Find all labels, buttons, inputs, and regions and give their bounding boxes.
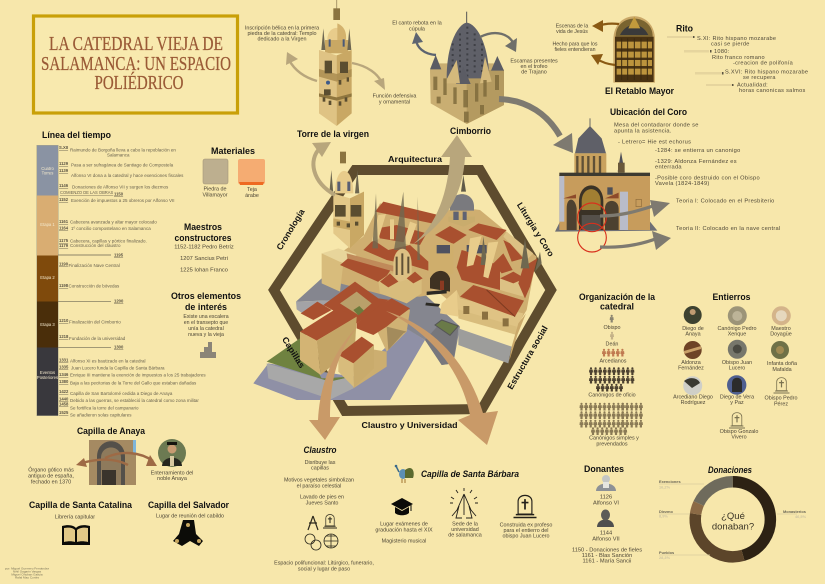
heading: materiales: Materiales: [211, 146, 255, 156]
timeline events: 1164: [59, 226, 69, 230]
text: escamas: Escamas presentes: [510, 58, 558, 64]
burial labels: Obispo Juan: [722, 360, 752, 366]
heading: torre: Torre de la virgen: [297, 129, 369, 139]
text: escalera: unía la catedral: [188, 326, 224, 332]
panel: torre de la virgen: [245, 0, 416, 139]
burial labels: Anaya: [685, 332, 701, 338]
panel: retablo mayor: [552, 16, 674, 96]
text: órgano: antiguo de españa,: [28, 474, 74, 480]
label: teja árabe: árabe: [245, 193, 259, 199]
timeline events: Alfonso XI es bautizado en la catedral: [70, 358, 146, 364]
list of masters: 1207 Sancius Petri: [180, 256, 228, 262]
label: estructura social: Estructura social: [505, 324, 550, 391]
text: canto: El canto rebota en la: [392, 20, 442, 26]
text: coro notes: -Posible coro destruido con el Obispo: [655, 176, 760, 182]
timeline events: 1175: [59, 238, 69, 243]
illustration: coro: [555, 118, 657, 252]
bust: Alfonso VI: [596, 475, 616, 491]
panel: organización de la catedral: [579, 292, 656, 447]
text: Alfonso VII: Alfonso VII: [592, 536, 620, 542]
panel: materiales: [202, 146, 265, 199]
text: donaciones list: 1150 - Donaciones de fieles: [572, 548, 642, 554]
timeline events: 1º concilio compostelano en Salamanca: [71, 226, 151, 231]
donut labels: Pueblos: [659, 550, 674, 555]
text: magisterio: Magisterio musical: [382, 538, 426, 544]
timeline events: 1210: [59, 318, 69, 323]
timeline events: Se fortifica la torre del campanario: [70, 406, 139, 410]
arrow: to inscripción: [286, 52, 317, 81]
burial labels: Lucero: [729, 366, 745, 372]
hexagon frame: [274, 170, 551, 411]
heading: rito: Rito: [676, 24, 693, 34]
illustration: retablo: [613, 16, 655, 83]
burial portraits: [683, 306, 791, 428]
panel: cimborrio: [392, 12, 558, 136]
hexagon labels: [274, 154, 556, 430]
text: rito list: se recupera: [743, 75, 776, 81]
timeline events: Se añadieron solas capitulares: [70, 412, 132, 418]
heading: línea del tiempo: Línea del tiempo: [42, 130, 111, 140]
arrows: [76, 453, 157, 467]
text: enterramiento: Enterramiento del: [151, 470, 193, 476]
illustration: catedral: [253, 152, 542, 400]
text: coro notes: enterrada: [655, 164, 682, 170]
text: construida: Construida ex profeso: [500, 522, 552, 528]
donut labels: 28,3%: [659, 555, 671, 560]
arrow: catedral to Santa Bárbara: [386, 311, 498, 445]
icon: peacock: [395, 465, 414, 483]
pictogram: deán: [610, 332, 614, 340]
panel: línea del tiempo: [36, 130, 206, 418]
arrow: to hecho: [591, 54, 615, 65]
panel: entierros: [673, 292, 797, 441]
timeline events: 1458: [59, 402, 69, 406]
timeline column: Eventos: [40, 370, 55, 375]
timeline events: COMIENZO DE LAS OBRAS: [60, 190, 113, 195]
heading: capilla de Anaya: Capilla de Anaya: [77, 426, 146, 436]
burial labels: [673, 326, 797, 441]
label: claustro y universidad: Claustro y Universidad: [362, 420, 458, 430]
timeline events: 1198: [59, 283, 69, 288]
icon: praying hands: [450, 488, 478, 518]
burial labels: Vivero: [731, 435, 747, 441]
text: escamas: en el trofeo: [521, 64, 547, 70]
timeline events: 1179: [59, 243, 69, 248]
panel: donaciones: [659, 465, 807, 560]
donut chart: [695, 482, 770, 557]
donut center text: ¿Qué: [721, 511, 745, 522]
label: canónigos simples: Canónigos simples y: [589, 436, 639, 442]
burial labels: y Paz: [730, 400, 744, 406]
timeline events: 1152: [59, 197, 69, 202]
panel: donantes: [572, 464, 642, 565]
text: lugar exámenes: graduación hasta el XIX: [375, 527, 433, 533]
text: Alfonso VI: Alfonso VI: [593, 500, 619, 506]
timeline events: Capilla de San Bartolomé cedida a Diego de Anaya: [70, 391, 173, 396]
text: Alfonso VII: 1144: [600, 530, 612, 536]
text: inscripción: Inscripción bélica en la primera: [245, 26, 319, 32]
arrow: catedral to torre: [312, 142, 335, 195]
timeline events: 1380: [59, 379, 69, 384]
burial labels: Doyagüe: [770, 332, 792, 338]
timeline events: 1190: [59, 262, 69, 266]
illustration: tower: [319, 0, 352, 126]
timeline events: 1422: [59, 389, 69, 394]
burial labels: Mafalda: [772, 367, 792, 373]
text: inscripción: dedicado a la Virgen: [257, 37, 307, 43]
timeline events: Construcción del claustro: [70, 243, 121, 248]
timeline events: Pasa a ser sufragánea de Santiago de Compostela: [71, 162, 174, 168]
text: rito list: -creacion de polifonía: [733, 60, 794, 66]
text: hecho: fieles entendieran: [555, 47, 596, 53]
timeline events: Debido a las guerras, se estableció la catedral como zona militar: [70, 398, 199, 403]
icons: claustro: [305, 515, 338, 550]
burial labels: Obispo Pedro: [765, 396, 797, 402]
text: Alfonso VI: 1126: [600, 494, 612, 500]
timeline events: Finalización Nave Central: [68, 263, 120, 268]
heading: organización: Organización de la: [579, 292, 656, 302]
timeline events: Cabecera, capillas y pórtico finalizado.: [70, 238, 147, 244]
timeline events: S.XII: [59, 145, 68, 150]
timeline events: Juan Lucero funda la Capilla de Santa Bárbara: [71, 366, 165, 370]
text: escamas: de Trajano: [521, 70, 547, 76]
panel: capilla del Salvador: [148, 500, 229, 546]
timeline events: 1161: [59, 219, 69, 224]
label: capillas: Capillas: [280, 335, 307, 370]
burial labels: Arcediano Diego: [673, 394, 713, 400]
label: piedra de Villamayor: Villamayor: [202, 192, 228, 198]
arrow: teoría I: [600, 200, 670, 217]
text: coro notes: Vavela (1824-1849): [655, 181, 710, 187]
burial labels: Aldonza: [681, 360, 701, 366]
label: canónigos simples: prevendados: [596, 441, 628, 447]
label: obispo: Obispo: [603, 325, 621, 331]
credits: Miguel Oñoban Galicia: [11, 572, 43, 576]
text: rito list: S.XI: Rito hispano mozarabe: [697, 36, 776, 42]
bust: Alfonso VII: [597, 510, 614, 527]
burial labels: Diego de Vera: [720, 394, 754, 400]
text: sede: universidad: [451, 527, 479, 533]
panel: otros elementos de interés: de interés: [185, 302, 227, 312]
donut labels: Exenciones: [659, 479, 681, 484]
text: coro notes: [614, 122, 781, 232]
timeline events: Fundación de la universidad: [69, 336, 126, 341]
burial labels: Canónigo Pedro: [718, 326, 756, 332]
list of masters: 1152-1182 Pedro Betríz: [174, 244, 234, 250]
timeline column: Etapa 2: [40, 275, 55, 280]
swatch: teja árabe: [238, 159, 265, 185]
text: rito list: 1080:: [714, 49, 730, 55]
heading: claustro: Claustro: [304, 445, 337, 455]
timeline events: Alfonso VI dona a la catedral y hace exenciones fiscales: [71, 173, 184, 178]
burial labels: Diego de: [682, 326, 704, 332]
icon: book: [62, 525, 90, 545]
text: coro notes: - Letrero= Hie est echorus: [618, 140, 691, 146]
donut labels: Diezmo: [659, 509, 673, 514]
arrow: to escenas: [592, 20, 619, 32]
timeline events: Exención de impuestos a 25 obreros por Alfonso VII: [71, 198, 175, 203]
panel: rito: [667, 24, 808, 94]
ground and walls: [253, 278, 512, 400]
text: espacio polifuncional: Espacio polifuncional: Litúrgico, funerario,: [274, 560, 374, 566]
heading: donaciones: Donaciones: [708, 465, 752, 475]
donut labels: 46,5%: [795, 514, 807, 519]
title: POLIÉDRICO: [94, 71, 184, 94]
text: claustro: Disribuye las: [305, 460, 335, 466]
text: enterramiento: noble Anaya: [157, 476, 187, 482]
icon: stairs: [200, 342, 216, 358]
text: donaciones list: 1161 - Blas Sanción: [582, 553, 632, 559]
text: claustro: capillas: [311, 466, 329, 472]
text: inscripción: piedra de la catedral: Templo: [247, 31, 317, 37]
donut labels: [659, 479, 807, 560]
icon: grave: [514, 495, 536, 518]
text: coro notes: -1329: Aldonza Fernández es: [655, 159, 737, 165]
panel: maestros constructores: constructores: [174, 233, 232, 243]
timeline column: Etapa 1: [40, 222, 55, 227]
pictogram: obispo: [610, 315, 614, 322]
title: LA CATEDRAL VIEJA DE: [49, 33, 223, 55]
label: piedra de Villamayor: Piedra de: [203, 186, 227, 192]
title: SALAMANCA: UN ESPACIO: [41, 53, 231, 75]
heading: entierros: Entierros: [712, 292, 750, 302]
text: Lugar de reunión del cabildo: [156, 514, 224, 520]
text: rito list: [697, 36, 808, 94]
timeline events: Finalización del Cimborrio: [69, 320, 121, 324]
label: liturgia y coro: Liturgia y Coro: [515, 200, 556, 258]
bullet lines: [667, 36, 732, 86]
panel: ubicación del coro: [555, 107, 781, 252]
label: cronología: Cronología: [274, 207, 307, 252]
timeline events: Cabecera avanzada y altar mayor colocado: [70, 220, 157, 224]
text: construida: obispo Juan Lucero: [502, 534, 550, 540]
arrow: teoría II: [600, 231, 671, 250]
arrow: to escamas: [480, 33, 517, 52]
heading: santa bárbara: Capilla de Santa Bárbara: [421, 469, 519, 479]
text: coro notes: apunta la asistencia.: [614, 128, 672, 134]
panel: maestros constructores: [174, 222, 234, 274]
text: canto: cúpula: [409, 26, 425, 32]
timeline events: 1146: [59, 183, 69, 188]
panel: claustro: [274, 445, 374, 572]
heading: otros elementos: Otros elementos: [171, 291, 241, 301]
panel: claustro: el paraíso celestial: [297, 483, 341, 489]
text: órgano: fechado en 1370: [31, 480, 71, 486]
timeline events: Construcción de bóvedas: [68, 284, 120, 288]
timeline events: 1139: [59, 168, 69, 173]
text: espacio polifuncional: social y lugar de paso: [298, 566, 350, 572]
timeline column: Torres: [42, 170, 53, 176]
timeline events: 1335: [59, 364, 69, 370]
text: órgano: Órgano gótico más: [28, 468, 74, 474]
text: Librería capitular: [55, 514, 95, 520]
tower: [329, 152, 364, 248]
bullet dots: [693, 36, 734, 86]
credits: Rafal Mao Cortés: [15, 576, 39, 580]
timeline events: 1440: [59, 396, 69, 402]
text: rito list: Rito franco romano: [712, 55, 765, 61]
label: teja árabe: Teja: [247, 187, 257, 193]
right block: [425, 285, 526, 361]
text: escenas: Escenas de la: [556, 24, 588, 30]
icon: graduation cap: [391, 498, 413, 515]
icon: figures: [173, 520, 203, 546]
timeline events: 1200: [114, 298, 124, 304]
credits: Nihil Gagarin Vargas: [13, 570, 42, 574]
text: función: y ornamental: [379, 99, 410, 105]
pictogram: canónigos simples: [580, 403, 643, 435]
timeline events: 1525: [59, 410, 69, 415]
text: escenas: vida de Jesús: [556, 29, 588, 35]
label: arquitectura: Arquitectura: [388, 154, 442, 164]
timeline events: 1129: [59, 161, 69, 166]
text: escalera: nueva y la vieja: [188, 332, 224, 338]
text: hecho: Hecho para que los: [552, 42, 598, 48]
burial labels: Pérez: [774, 401, 788, 407]
swatch: piedra de Villamayor: [203, 159, 228, 184]
timeline events: 1150: [114, 192, 124, 196]
pictogram: canónigos de oficio: [589, 367, 634, 392]
timeline column: Cuatro: [41, 166, 54, 171]
heading: ubicación: Ubicación del Coro: [610, 107, 687, 117]
label: deán: Deán: [606, 342, 618, 348]
heading: Capilla del Salvador: [148, 500, 229, 510]
burial labels: Fernández: [678, 366, 704, 372]
text: sede: Sede de la: [452, 522, 478, 528]
arrow: catedral to claustro: [309, 327, 357, 440]
burial labels: Infanta doña: [767, 361, 797, 367]
text: sede: de salamanca: [448, 533, 482, 539]
timeline events: Enrique III mantiene la exención de impuestos a los 25 trabajadores: [70, 372, 206, 378]
panel: capilla de Anaya: [28, 426, 193, 486]
arrow: catedral to cimborrio: [412, 135, 472, 245]
timeline events: 1346: [59, 372, 69, 377]
credits: por: Miguel Guerrero Fernández: [5, 566, 49, 570]
burial labels: Maestro: [771, 326, 791, 332]
arrow: cimborrio to coro: [499, 99, 573, 153]
label: arcedianos: Arcedianos: [600, 358, 627, 364]
text: construida: para el entierro del: [504, 528, 548, 534]
burial labels: Rodríguez: [681, 400, 706, 406]
text: función: Función defensiva: [373, 94, 416, 100]
timeline events: 1218: [59, 334, 69, 339]
text: lugar exámenes: Lugar exámenes de: [380, 522, 428, 528]
timeline events: 1331: [59, 358, 69, 362]
arrow: to canto: [412, 32, 436, 55]
text: coro notes: Teoria II: Colocado en la nave central: [676, 226, 781, 232]
pictogram: arcedianos: [602, 349, 624, 356]
text: rito list: horas canonicas salmos: [739, 88, 806, 94]
text: coro notes: Teoria I: Colocado en el Presbiterio: [676, 198, 775, 204]
donut center text: donaban?: [712, 522, 754, 532]
donut labels: 16,2%: [659, 484, 671, 490]
chapel apse: [378, 249, 423, 303]
text: coro notes: -1284: se entierra un canonigo: [655, 148, 741, 154]
panel: otros elementos de interés: [171, 291, 241, 358]
text: rito list: S.XVI: Rito hispano mozarabe: [725, 70, 808, 76]
heading: Capilla de Santa Catalina: [29, 500, 133, 510]
timeline column: [36, 145, 58, 416]
timeline column: Etapa 3: [40, 322, 55, 327]
label: canónigos de oficio: Canónigos de oficio: [588, 392, 636, 398]
text: donaciones list: 1161 - María Sancii: [583, 559, 631, 565]
panel: claustro: Lavado de pies en: [300, 494, 344, 500]
cloister block: [300, 282, 410, 388]
text: coro notes: Mesa del contadaror donde se: [614, 122, 699, 128]
heading: maestros constructores: Maestros: [184, 222, 222, 232]
list of masters: 1225 Iohan Franco: [180, 268, 228, 274]
burial labels: Xerique: [728, 332, 746, 338]
panel: claustro: Motivos vegetales simbolizan: [284, 478, 354, 484]
timeline column: Posteriores: [37, 375, 58, 380]
timeline events: 1300: [114, 344, 124, 350]
text: escalera: en el transepto que: [184, 320, 228, 326]
heading: retablo: El Retablo Mayor: [605, 86, 674, 96]
text: rito list: Actualidad:: [737, 82, 768, 88]
donut labels: Monasterios: [783, 509, 806, 514]
heading: cimborrio: Cimborrio: [450, 126, 491, 136]
illustration: cimborrio: [430, 12, 504, 124]
heading: donantes: Donantes: [584, 464, 624, 474]
timeline events: [58, 145, 206, 418]
panel: organización de la catedral: catedral: [600, 302, 634, 312]
panel: capilla de Santa Bárbara: [375, 465, 552, 544]
burial labels: Obispo Gonzalo: [720, 429, 758, 435]
donut labels: 8,9%: [659, 514, 668, 518]
portrait: Anaya: [158, 439, 186, 467]
panel: claustro: Jueves Santo: [306, 500, 338, 506]
title: [34, 16, 238, 113]
photo: capilla: [89, 440, 136, 485]
timeline events: Salamanca: [107, 152, 130, 158]
timeline events: Raimundo de Borgoña lleva a cabo la repoblación en: [70, 148, 176, 152]
text: escalera: Existe una escalera: [183, 314, 229, 320]
timeline events: 1195: [114, 252, 124, 258]
panel: capilla de Santa Catalina: [29, 500, 133, 545]
text: rito list: casi se pierde: [711, 42, 750, 48]
arrow: to función: [352, 63, 385, 90]
main body: [322, 175, 542, 327]
timeline events: Baja a las pecitorias de la Torre del Gallo que estaban dañadas: [70, 380, 197, 386]
timeline events: Donaciones de Alfonso VII y surgen los diezmos: [72, 184, 169, 190]
